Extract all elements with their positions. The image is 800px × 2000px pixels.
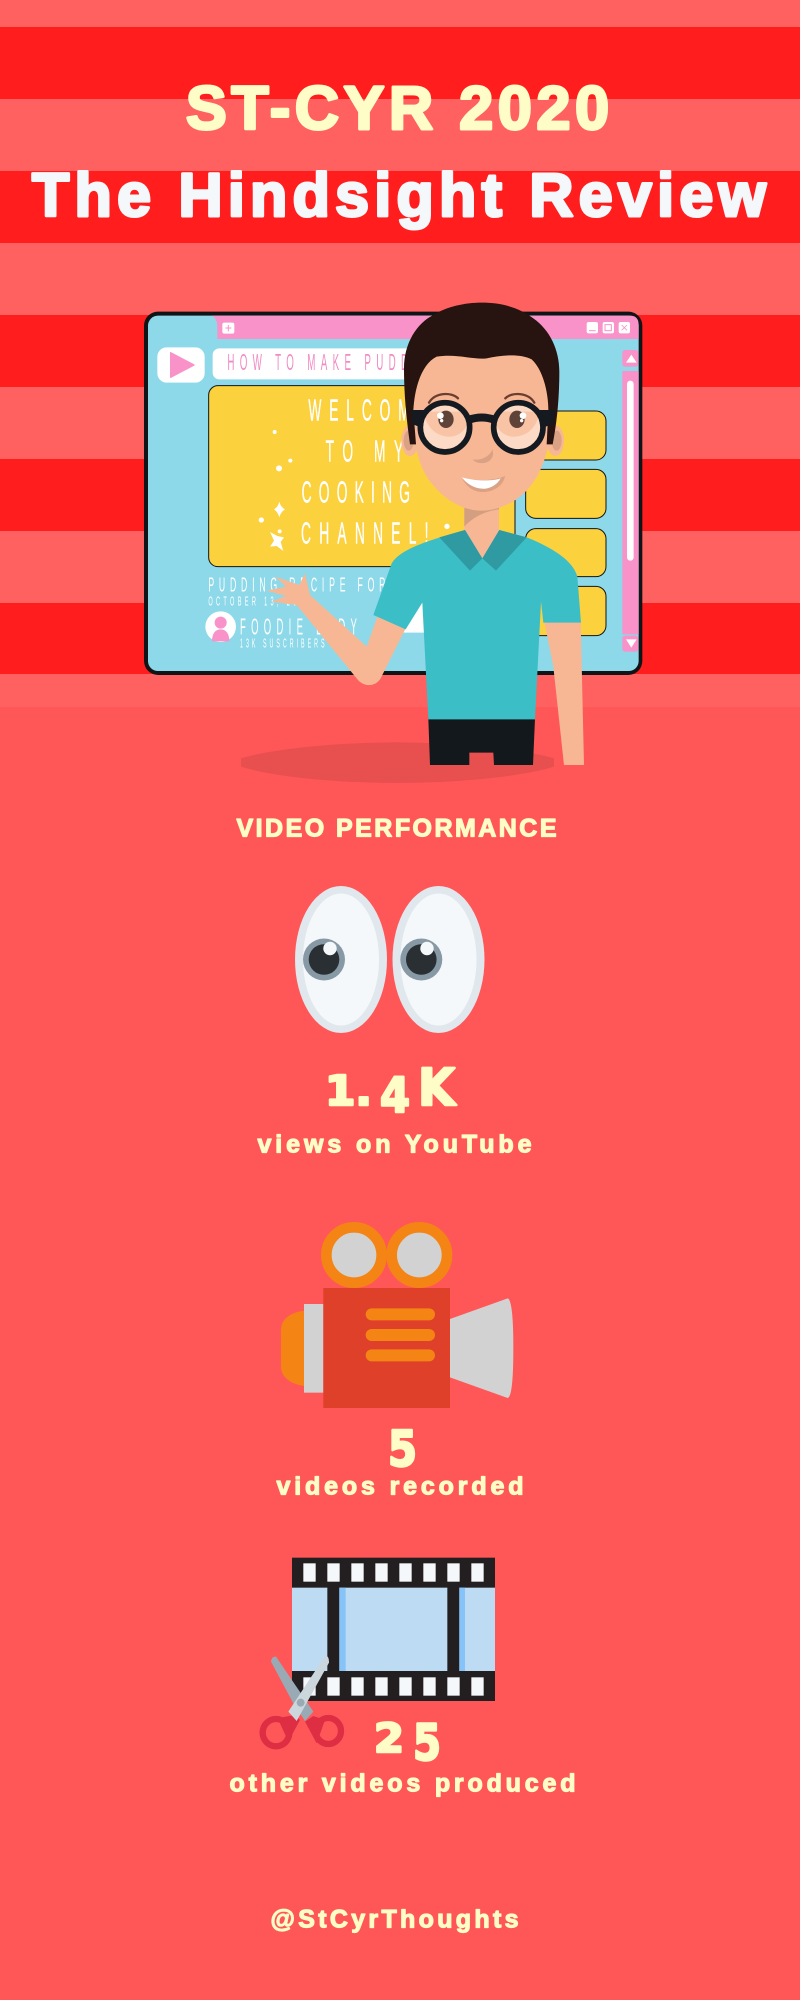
- icon: scissors: [263, 1656, 341, 1746]
- footer handle: @StCyrThoughts: [270, 1906, 518, 1934]
- video details text: OCTOBER 13, 2020: [208, 595, 309, 610]
- neck: [464, 500, 499, 558]
- title bar: [212, 316, 639, 339]
- teal shirt: [373, 530, 581, 719]
- stat: 25: [374, 1714, 441, 1772]
- title: ST-CYR 2020: ST-CYR 2020: [186, 74, 609, 142]
- icon: eyes: [295, 886, 484, 1033]
- label: videos recorded: videos recorded: [276, 1472, 524, 1500]
- label: views on YouTube: views on YouTube: [258, 1130, 532, 1158]
- search bar: HOW TO MAKE PUDDING: [227, 349, 442, 375]
- icon: film camera: [281, 1227, 513, 1408]
- presenter character: [267, 303, 584, 765]
- stat: 1.4K: [325, 1059, 457, 1124]
- hair: [404, 303, 559, 444]
- title: The Hindsight Review: The Hindsight Review: [32, 161, 767, 229]
- trousers: [428, 719, 535, 765]
- stat: 25: 5: [413, 1714, 441, 1772]
- face: [412, 350, 552, 511]
- stat: 1.4K: 1.: [325, 1067, 372, 1115]
- stat: 1.4K: K: [418, 1059, 457, 1118]
- shirt collar: [439, 530, 527, 571]
- sidebar thumbnails: [526, 411, 606, 636]
- sparkles: [259, 430, 450, 551]
- video details text: FOODIE LADY: [240, 613, 357, 640]
- right arm: [544, 620, 584, 765]
- video window: [144, 312, 642, 675]
- glasses and eyes: [412, 403, 555, 452]
- stat: 5: 5: [388, 1421, 417, 1478]
- video thumbnail: COOKING: [302, 475, 410, 510]
- stat: 25: 2: [374, 1716, 404, 1762]
- subscribe chip: [400, 602, 430, 633]
- label: other videos produced: other videos produced: [230, 1770, 576, 1798]
- illustration: presenter and video window: [144, 303, 642, 783]
- video thumbnail: WELCOME: [308, 394, 427, 428]
- scrollbar: [622, 350, 639, 652]
- video details text: PUDDING RECIPE FOR: [208, 575, 385, 597]
- video thumbnail: CHANNEL!: [301, 516, 428, 551]
- ground shadow: [241, 742, 554, 783]
- video thumbnail: TO MY: [326, 435, 403, 469]
- stat: 1.4K: 4: [380, 1068, 410, 1124]
- play button: [157, 347, 205, 383]
- waving arm: [267, 573, 406, 685]
- heading: video performance: VIDEO PERFORMANCE: [236, 814, 556, 842]
- eyebrows: [429, 394, 534, 403]
- video thumbnail: [209, 386, 515, 567]
- mouth: [462, 476, 505, 492]
- nose: [473, 449, 493, 463]
- icon: film strip: [263, 1558, 495, 1746]
- window buttons: [587, 322, 630, 333]
- video details text: [205, 575, 385, 652]
- ears: [401, 425, 564, 456]
- video details text: 13K SUSCRIBERS: [240, 637, 325, 652]
- new tab button: [222, 323, 234, 334]
